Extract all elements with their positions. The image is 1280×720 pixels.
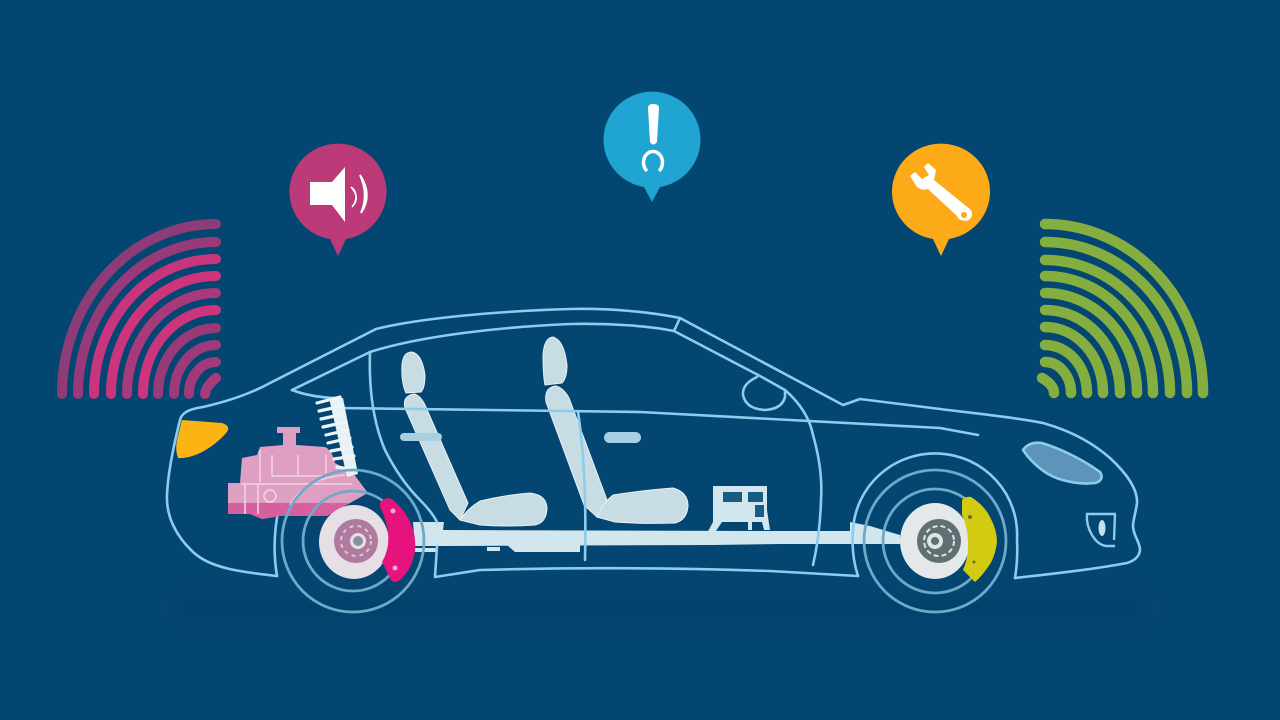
rear seat armrest: [400, 433, 442, 441]
car body outline: [167, 309, 1140, 578]
rear brake disc: [319, 505, 389, 579]
front wheel arch: [853, 453, 1017, 578]
windshield pillar: [674, 318, 680, 331]
rear wheel rings: [282, 470, 424, 612]
chassis floor: [413, 486, 900, 552]
suspension spring: [317, 397, 358, 477]
mirror: [743, 377, 785, 410]
sound waves: right green: [1042, 224, 1203, 393]
tail light: [176, 420, 228, 458]
front emblem: [1087, 514, 1116, 546]
upper window line: [292, 324, 813, 435]
belt line: [340, 408, 978, 435]
front seat: [543, 337, 688, 523]
rear seat: [402, 352, 547, 526]
front brake caliper: [962, 497, 997, 582]
callout: sound icon bubble: [289, 144, 386, 256]
head light: [1023, 443, 1102, 484]
sound waves: left pink: [62, 224, 216, 394]
rear wheel arch: [275, 503, 280, 576]
callout: wrench icon bubble: [892, 144, 990, 256]
front brake disc: [900, 503, 970, 579]
front seat armrest: [604, 432, 641, 443]
seat rail frame: [705, 486, 770, 537]
front door edge: [813, 435, 821, 565]
outer body: [167, 309, 1140, 578]
rear door line: [370, 352, 437, 522]
rear brake caliper: [380, 498, 415, 582]
sill: [435, 546, 858, 577]
callout: warning icon bubble: [603, 92, 700, 202]
ground shadow: [178, 600, 1143, 616]
engine: [228, 427, 368, 519]
seats: [400, 337, 688, 526]
center pillar: [578, 412, 585, 560]
front wheel rings: [864, 470, 1006, 612]
